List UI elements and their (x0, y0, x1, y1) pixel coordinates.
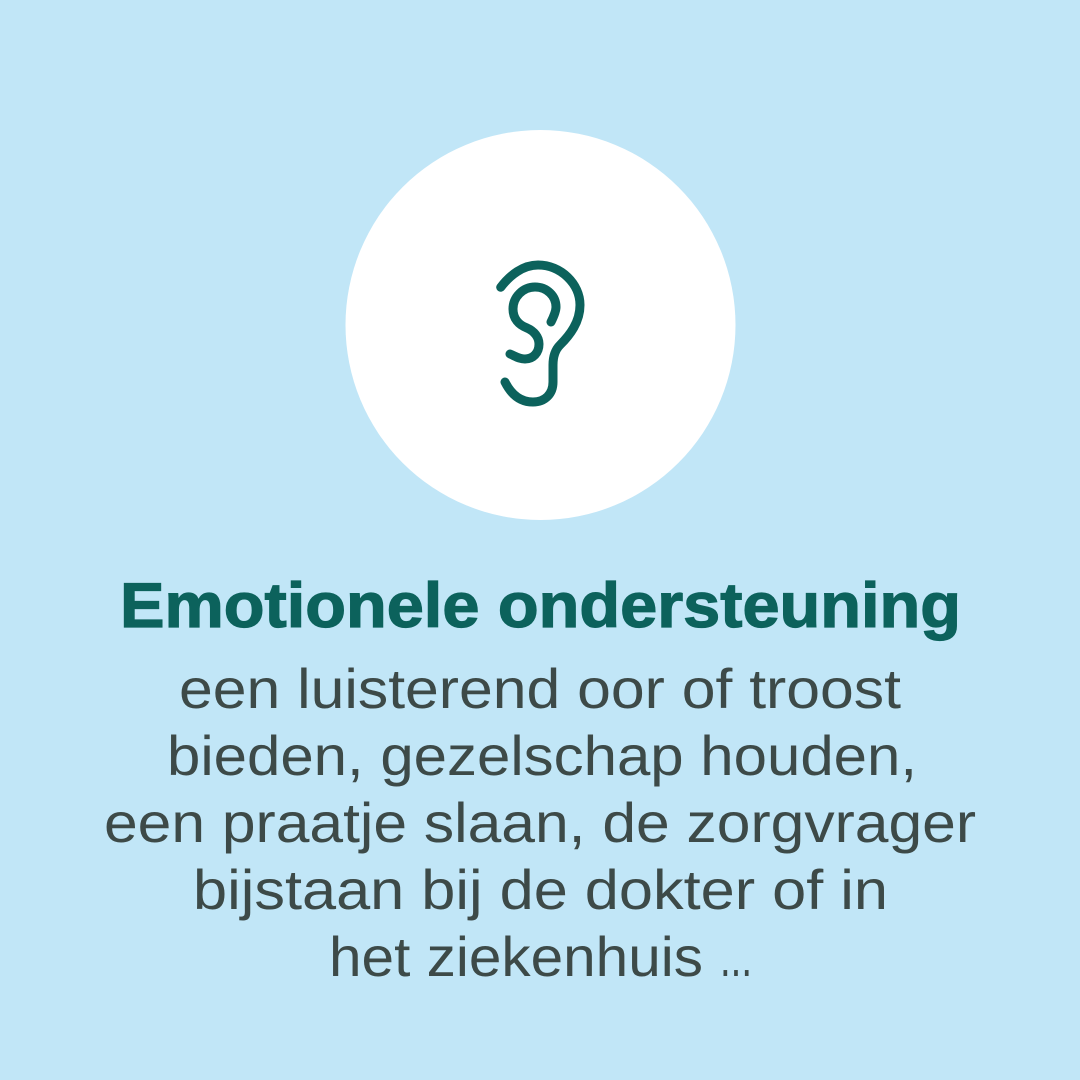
icon: ear (501, 265, 580, 402)
body text (104, 657, 976, 988)
title: Emotionele ondersteuning (120, 571, 961, 641)
body text: het ziekenhuis (329, 925, 703, 988)
body text: bieden, gezelschap houden, (167, 724, 917, 787)
body text: een luisterend oor of troost (179, 657, 901, 720)
white circle behind icon (346, 130, 736, 520)
body text: een praatje slaan, de zorgvrager (104, 791, 976, 854)
body text: ... (720, 925, 752, 988)
body text: bijstaan bij de dokter of in (193, 858, 888, 921)
